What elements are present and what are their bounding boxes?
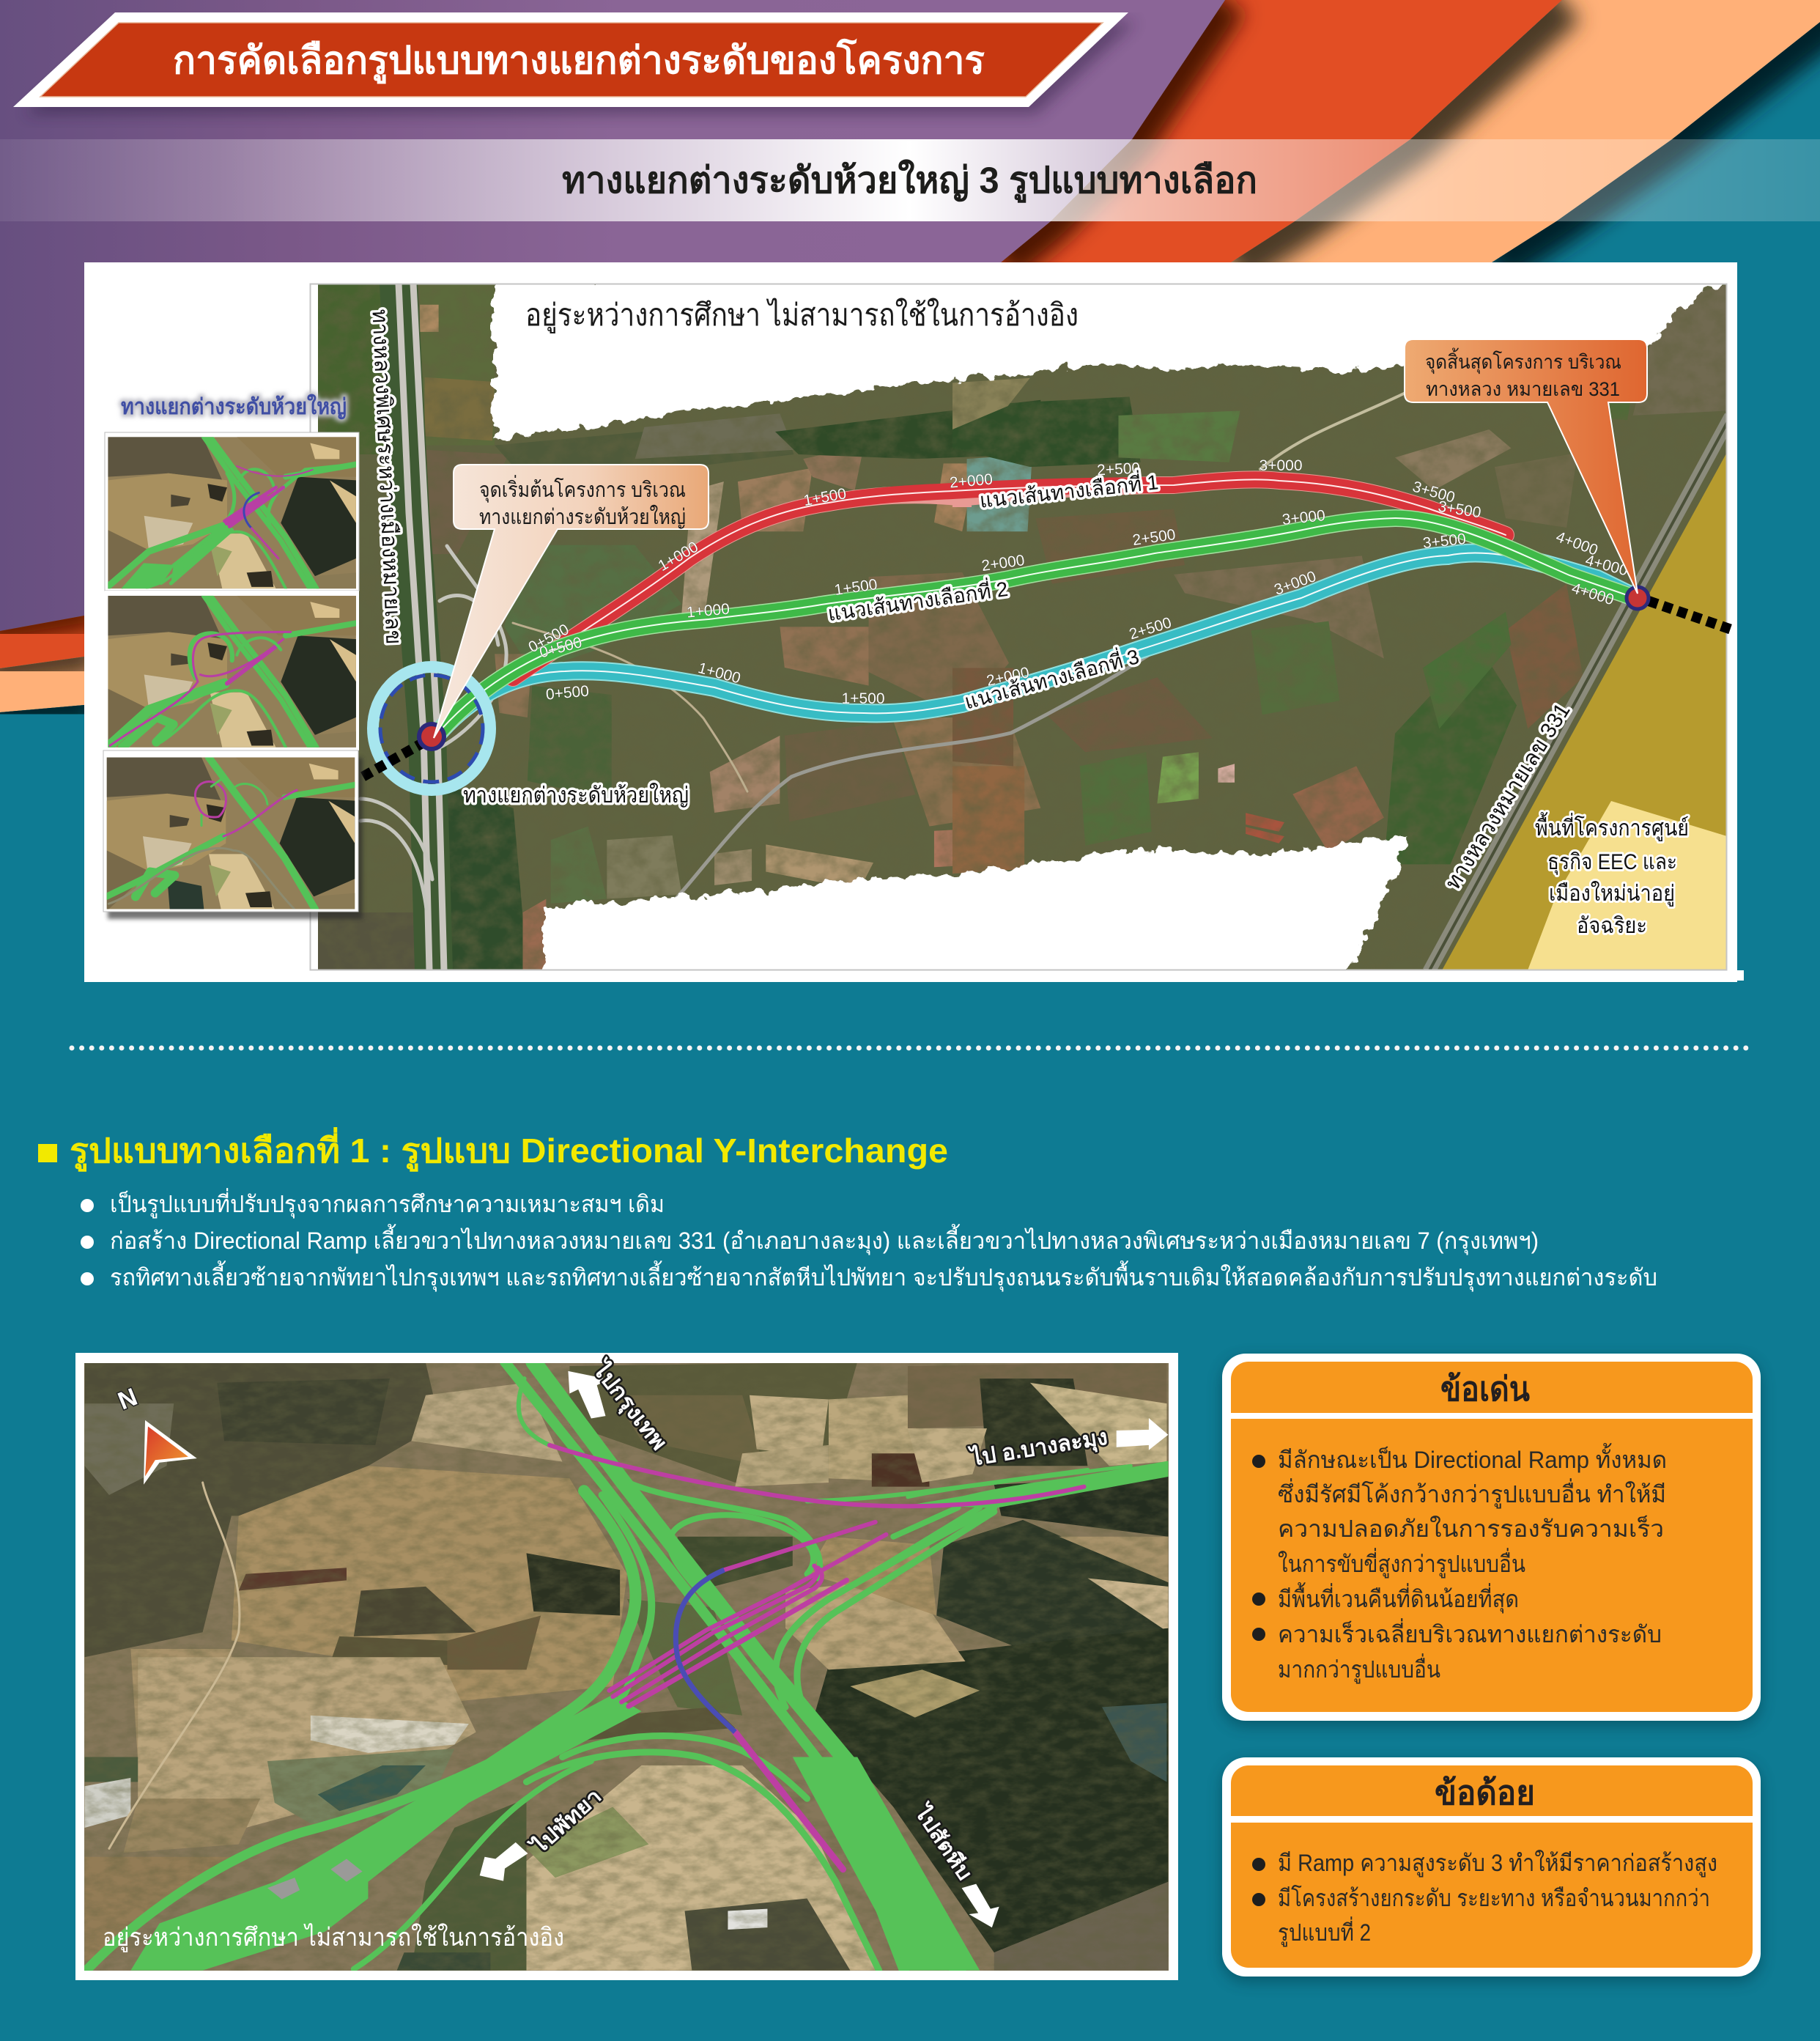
chainage labels: 4+000 [1583, 552, 1630, 579]
chainage labels: 4+000 [1569, 580, 1616, 608]
subtitle band [0, 139, 1820, 221]
route alternative 1 (red) [513, 479, 1506, 678]
left stripes behind panel [0, 616, 84, 714]
chainage labels: 0+500 [526, 621, 571, 656]
EEC zone [1429, 416, 1738, 972]
route name labels [826, 468, 1159, 714]
chainage labels: 2+000 [980, 552, 1026, 575]
section bullets: ก่อสร้าง Directional Ramp เลี้ยวขวาไปทางหลวงหมายเลข 331 (อำเภอบางละมุง) และเลี้ยวขวาไปทางหลวงพิเศษระหว่างเมืองหมายเลข 7 (กรุงเทพฯ) [110, 1224, 1539, 1255]
label: highway 331: ทางหลวงหมายเลข 331 [1440, 699, 1575, 894]
road network lanes [360, 284, 1407, 970]
chainage labels: 2+000 [949, 470, 994, 492]
highway 331 [1429, 416, 1731, 972]
route alternative 3 (cyan) [434, 553, 1638, 738]
advantages list: ความปลอดภัยในการรองรับความเร็ว [1278, 1515, 1664, 1542]
chainage labels: 3+500 [1422, 531, 1467, 552]
chainage labels: 2+500 [1128, 614, 1174, 643]
route name labels: แนวเส้นทางเลือกที่ 1 [978, 468, 1159, 512]
chainage labels: 0+500 [545, 682, 590, 704]
label: EEC zone [1535, 812, 1689, 938]
title banner [13, 12, 1136, 114]
chainage labels: 0+500 [538, 634, 584, 661]
interchange roads (green) [87, 1362, 1168, 1971]
disadvantages list [1252, 1850, 1717, 1947]
chainage labels: 3+000 [1272, 568, 1318, 599]
label: EEC zone: ธุรกิจ EEC และ [1547, 850, 1677, 876]
chainage labels: 3+500 [1410, 479, 1457, 506]
section bullets [81, 1188, 1657, 1292]
north arrow [144, 1420, 197, 1485]
diagonal stripe: orange [1001, 0, 1562, 262]
end point marker [1627, 587, 1649, 609]
north letter: N [114, 1383, 141, 1415]
disadvantages list: มีโครงสร้างยกระดับ ระยะทาง หรือจำนวนมากกว่า [1278, 1885, 1710, 1911]
chainage labels: 1+000 [655, 539, 701, 575]
title text: การคัดเลือกรูปแบบทางแยกต่างระดับของโครงการ [173, 37, 985, 84]
callout: end of project [1405, 339, 1647, 594]
image watermark note: อยู่ระหว่างการศึกษา ไม่สามารถใช้ในการอ้างอิง [103, 1923, 564, 1952]
diagonal stripe: peach [1231, 0, 1820, 262]
heading: disadvantages: ข้อด้อย [1435, 1774, 1535, 1812]
advantages list: ความเร็วเฉลี่ยบริเวณทางแยกต่างระดับ [1278, 1618, 1662, 1647]
panel: interchange aerial image [66, 1353, 1194, 1980]
flyover ramp (blue) [676, 1570, 735, 1732]
map border [311, 284, 1726, 970]
callout: end of project: ทางหลวง หมายเลข 331 [1426, 378, 1620, 400]
chainage labels: 3+500 [1437, 498, 1482, 522]
chainage labels: 3+000 [1259, 457, 1302, 474]
start point marker [419, 724, 444, 749]
panel: project alignment map [84, 262, 1744, 982]
subtitle text: ทางแยกต่างระดับห้วยใหญ่ 3 รูปแบบทางเลือก [562, 159, 1257, 203]
advantages list: มีพื้นที่เวนคืนที่ดินน้อยที่สุด [1278, 1582, 1519, 1614]
start circle halo [373, 667, 490, 790]
route name labels: แนวเส้นทางเลือกที่ 3 [961, 642, 1142, 714]
chainage labels: 4+000 [1554, 528, 1600, 559]
chainage labels: 1+500 [842, 690, 884, 707]
inset heading: ทางแยกต่างระดับห้วยใหญ่ [121, 394, 347, 420]
study note: อยู่ระหว่างการศึกษา ไม่สามารถใช้ในการอ้างอิง [525, 298, 1079, 333]
page background [0, 0, 1820, 714]
aerial map base [308, 284, 1727, 970]
chainage labels: 2+500 [1097, 459, 1141, 479]
route alternative 2 (green) [434, 518, 1638, 738]
callout: end of project: จุดสิ้นสุดโครงการ บริเวณ [1425, 347, 1621, 374]
chainage labels: 3+000 [1281, 507, 1326, 528]
advantages list: ซึ่งมีรัศมีโค้งกว้างกว่ารูปแบบอื่น ทำให้มี [1278, 1478, 1666, 1509]
inset 2: loop alternative [105, 591, 359, 750]
chainage labels [526, 457, 1630, 707]
blank white areas of map [495, 278, 1736, 978]
heading: advantages: ข้อเด่น [1440, 1370, 1530, 1408]
texture [318, 284, 1727, 970]
inset 3: partial loop alternative [103, 750, 363, 919]
section bullets: เป็นรูปแบบที่ปรับปรุงจากผลการศึกษาความเหมาะสมฯ เดิม [110, 1188, 665, 1219]
inset 1: directional Y [105, 432, 359, 591]
panel: disadvantages [1222, 1757, 1761, 1982]
panel: advantages [1222, 1354, 1761, 1726]
label: to Sattahip: ไปสัตหีบ [909, 1799, 977, 1884]
label: EEC zone: พื้นที่โครงการศูนย์ [1535, 812, 1689, 841]
aerial ground [66, 1354, 1194, 1977]
disadvantages list: รูปแบบที่ 2 [1278, 1916, 1371, 1947]
purple field [0, 0, 1225, 631]
chainage labels: 1+000 [696, 660, 742, 687]
label: to Bangkok: ไปกรุงเทพ [585, 1355, 673, 1455]
advantages list: มีลักษณะเป็น Directional Ramp ทั้งหมด [1278, 1443, 1667, 1473]
inset heading: ทางแยกต่างระดับห้วยใหญ่ [121, 394, 347, 420]
chainage labels: 1+000 [686, 600, 730, 621]
elevated ramps (magenta) [550, 1445, 1084, 1870]
route name labels: แนวเส้นทางเลือกที่ 2 [826, 575, 1010, 625]
callout: start of project: ทางแยกต่างระดับห้วยใหญ่ [479, 504, 686, 529]
disadvantages list: มี Ramp ความสูงระดับ 3 ทำให้มีราคาก่อสร้างสูง [1278, 1850, 1717, 1878]
direction arrows [480, 1371, 1168, 1927]
section bullets: รถทิศทางเลี้ยวซ้ายจากพัทยาไปกรุงเทพฯ และรถทิศทางเลี้ยวซ้ายจากสัตหีบไปพัทยา จะปรับปรุงถนนระดับพื้นราบเดิมให้สอดคล้องกับการปรับปรุงทางแยกต่างระดับ [110, 1261, 1657, 1292]
map patches east [952, 284, 1727, 874]
dotted divider [72, 1045, 1753, 1051]
map patches west [308, 284, 1040, 970]
advantages list: มากกว่ารูปแบบอื่น [1278, 1653, 1440, 1684]
label: to Pattaya: ไปพัทยา [525, 1784, 606, 1859]
ground texture [66, 1354, 1194, 1977]
advantages list: ในการขับขี่สูงกว่ารูปแบบอื่น [1278, 1548, 1525, 1579]
label: to Bang Lamung: ไป อ.บางละมุง [967, 1424, 1109, 1472]
callout: start of project: จุดเริ่มต้นโครงการ บริเวณ [479, 475, 686, 503]
label: EEC zone: เมืองใหม่น่าอยู่ [1549, 881, 1675, 907]
callout: start of project [434, 465, 709, 738]
label: EEC zone: อัจฉริยะ [1577, 914, 1647, 938]
toll plazas [267, 1859, 363, 1900]
chainage labels: 2+000 [985, 664, 1031, 690]
black dotted extensions [363, 601, 1734, 777]
section heading: รูปแบบทางเลือกที่ 1 : รูปแบบ Directional Y-Interchange [70, 1127, 948, 1172]
label: motorway 7: ทางหลวงพิเศษระหว่างเมืองหมายเลข [367, 309, 406, 645]
chainage labels: 1+500 [833, 576, 878, 599]
chainage labels: 1+500 [802, 485, 848, 509]
advantages list [1252, 1443, 1667, 1684]
diagonal stripe: dark teal shadow [1492, 22, 1820, 262]
label: interchange: ทางแยกต่างระดับห้วยใหญ่ [463, 783, 689, 808]
chainage labels: 2+500 [1131, 526, 1177, 549]
